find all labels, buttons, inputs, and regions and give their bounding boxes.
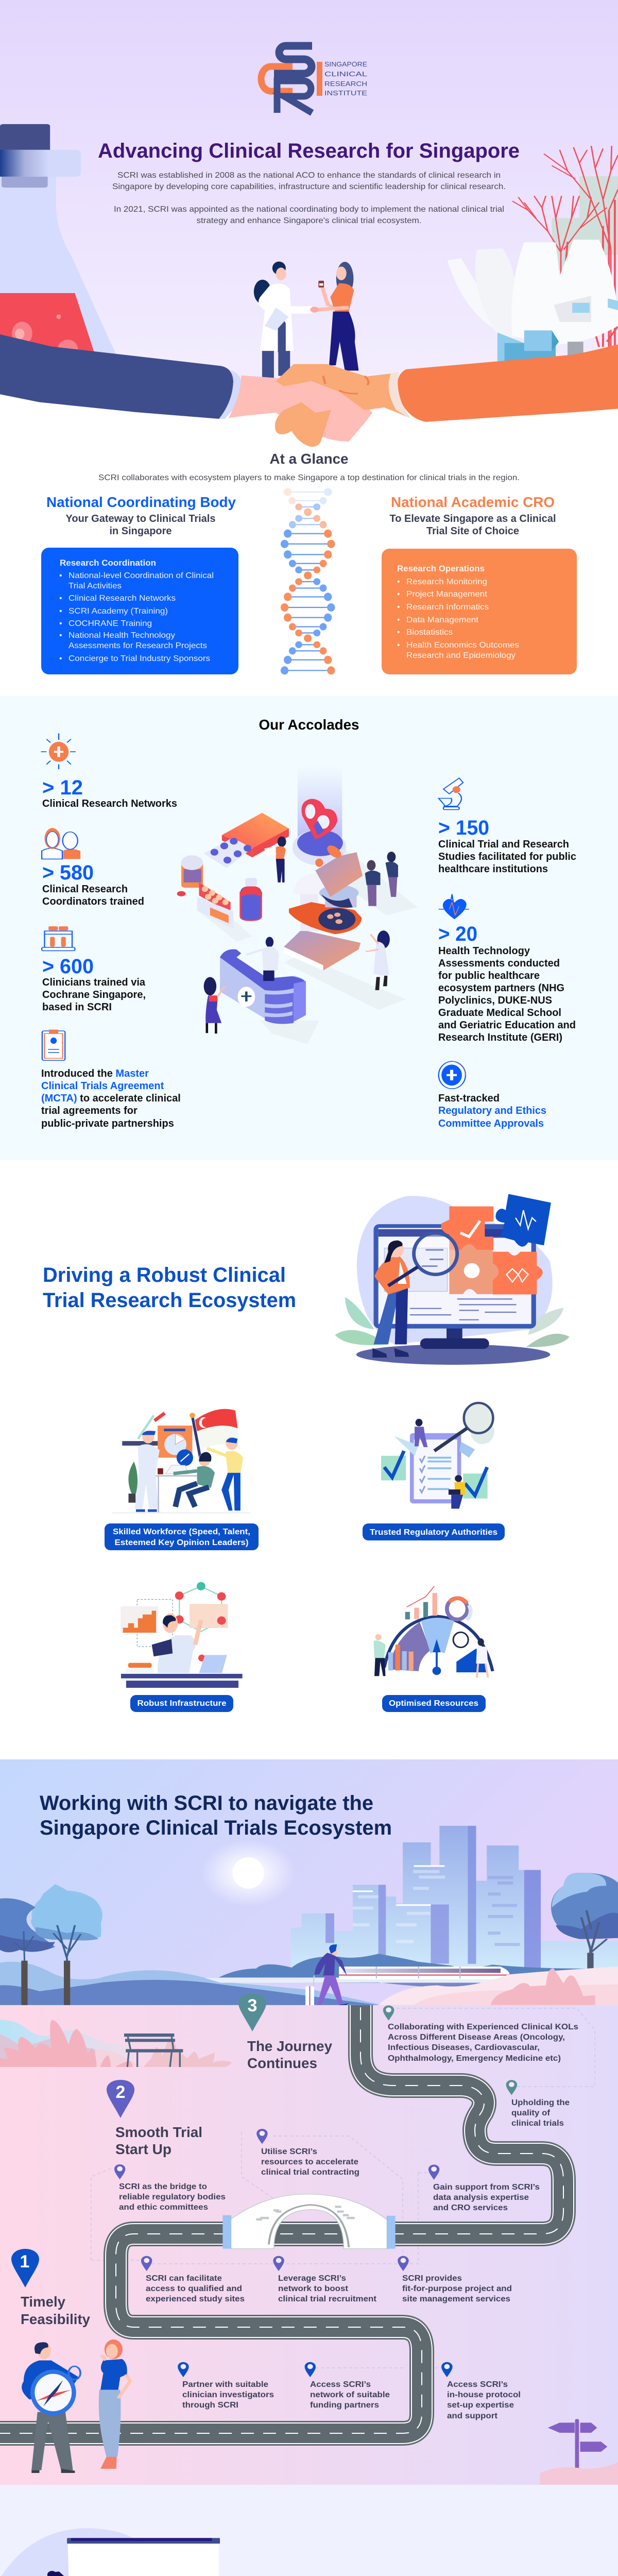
text blocks: journey steps: experienced study sites	[146, 2295, 245, 2303]
heading: national coordinating body: in Singapore	[109, 526, 172, 537]
heading: the journey continues: The Journey	[247, 2038, 332, 2054]
panel: research coordination: Concierge to Trial Industry Sponsors	[68, 654, 210, 663]
heading: national academic CRO: Trial Site of Choice	[426, 526, 519, 537]
stat: 20 health technology assessments: ecosystem partners (NHG	[438, 982, 564, 994]
stat: fast-tracked approvals	[438, 1061, 546, 1129]
panel: research coordination: Assessments for Research Projects	[68, 641, 207, 650]
stat: 12 networks	[41, 733, 177, 809]
heading: driving a robust ecosystem: Driving a Robust Clinical	[43, 1264, 286, 1286]
illustration: isometric clinic	[177, 766, 418, 1044]
text block: introduction	[112, 171, 506, 225]
icon: microscope	[439, 778, 463, 809]
panel: research coordination: •	[59, 571, 62, 580]
stat: 150 studies	[438, 778, 576, 875]
panel: working with SCRI	[0, 1759, 618, 2485]
panel: research coordination: •	[59, 594, 62, 603]
illustration: doctor and patient	[254, 262, 358, 379]
stat: 12 networks: Clinical Research Networks	[42, 798, 177, 809]
text blocks: journey steps: reliable regulatory bodies	[119, 2193, 226, 2201]
text block: introduction: SCRI was established in 2008 as the national ACO to enhance the standards of clinical research in	[117, 171, 501, 180]
label: trusted regulatory authorities	[363, 1523, 505, 1540]
illustration: optimised resources	[374, 1586, 493, 1677]
logo: SCRI	[261, 46, 367, 113]
stat: 20 health technology assessments: Polyclinics, DUKE-NUS	[438, 995, 552, 1006]
stat: 150 studies: Studies facilitated for public	[438, 851, 576, 862]
text block: subtitle: SCRI collaborates with ecosystem players to make Singapore a top destination for clinical trials in the region.	[98, 473, 520, 482]
stat: master clinical trials agreement: trial agreements for	[41, 1105, 138, 1116]
heading: national coordinating body: National Coordinating Body	[46, 494, 236, 510]
heading: national academic CRO: To Elevate Singapore as a Clinical	[389, 513, 556, 524]
illustration: bench and bushes	[0, 2020, 232, 2067]
panel: research operations: •	[397, 641, 400, 650]
panel: research coordination: National-level Coordination of Clinical	[68, 571, 214, 580]
heading: timely feasibility: Timely	[21, 2294, 65, 2310]
panel: research coordination: Trial Activities	[68, 582, 122, 590]
heading: our accolades: Our Accolades	[259, 717, 359, 733]
stat: 20 health technology assessments	[438, 894, 576, 1043]
text blocks: journey steps: and support	[447, 2412, 498, 2420]
stat: 20 health technology assessments: > 20	[438, 923, 477, 945]
stat: 580 coordinators: > 580	[42, 861, 94, 884]
icon: test tubes	[42, 926, 75, 951]
label: robust infrastructure	[130, 1695, 233, 1712]
stat: 20 health technology assessments: Assessments conducted	[438, 958, 560, 969]
heading: at a glance: At a Glance	[270, 451, 348, 467]
panel: research coordination: National Health Technology	[68, 631, 175, 640]
heading: the journey continues	[247, 2038, 332, 2071]
illustration: bridge	[222, 2194, 396, 2249]
panel: research coordination: COCHRANE Training	[68, 619, 152, 628]
marker: step 1	[11, 2249, 39, 2287]
stat: 150 studies: > 150	[438, 817, 489, 839]
heading: national coordinating body: Your Gateway to Clinical Trials	[66, 513, 215, 524]
stat: 20 health technology assessments: Graduate Medical School	[438, 1007, 561, 1019]
label: trusted regulatory authorities: Trusted Regulatory Authorities	[370, 1528, 497, 1537]
illustration: robust infrastructure	[121, 1582, 243, 1688]
label: skilled workforce	[105, 1523, 259, 1550]
stat: master clinical trials agreement: (MCTA)	[41, 1093, 77, 1104]
illustration: traveller	[305, 1944, 349, 2009]
heading: national academic CRO: National Academic CRO	[391, 494, 555, 510]
text blocks: journey steps: in-house protocol	[447, 2391, 521, 2399]
heading: national coordinating body	[46, 494, 236, 537]
icon: clipboard	[42, 1029, 65, 1060]
panel: research coordination: •	[59, 631, 62, 640]
title: Advancing Clinical Research for Singapore	[98, 140, 520, 162]
stat: master clinical trials agreement: Clinical Trials Agreement	[41, 1080, 164, 1092]
panel: research coordination: •	[59, 619, 62, 628]
stat: fast-tracked approvals: Fast-tracked	[438, 1093, 500, 1104]
panel: research operations: Research Informatics	[406, 603, 489, 612]
stat: master clinical trials agreement: to accelerate clinical	[77, 1093, 181, 1104]
text blocks: journey steps: clinical trial contracting	[261, 2168, 359, 2177]
text blocks: journey steps: Infectious Diseases, Cardiovascular,	[388, 2043, 540, 2052]
text blocks: journey steps: and ethic committees	[119, 2203, 208, 2212]
text block: introduction: Singapore by developing core capabilities, infrastructure and scientific leadership for clinical research.	[112, 182, 506, 191]
stat: 600 clinicians: > 600	[42, 955, 94, 978]
heading: smooth trial start up: Smooth Trial	[115, 2124, 202, 2140]
stat: 20 health technology assessments: Health Technology	[438, 945, 530, 957]
heading: smooth trial start up: Start Up	[115, 2141, 171, 2157]
text blocks: journey steps: clinical trials	[511, 2119, 564, 2128]
text blocks: journey steps: and CRO services	[433, 2204, 508, 2212]
text blocks: journey steps: access to qualified and	[146, 2284, 242, 2293]
stat: 150 studies: Clinical Trial and Research	[438, 839, 569, 850]
panel: research operations: •	[397, 603, 400, 612]
stat: 580 coordinators: Clinical Research	[42, 884, 128, 895]
panel: research operations: •	[397, 590, 400, 599]
text blocks: journey steps: clinician investigators	[182, 2391, 274, 2399]
heading: smooth trial start up	[115, 2124, 202, 2157]
panel: driving a robust ecosystem	[43, 1194, 570, 1712]
stat: 12 networks: > 12	[42, 776, 83, 799]
stat: 600 clinicians: Clinicians trained via	[42, 977, 146, 988]
panel: research coordination	[41, 548, 238, 674]
text blocks: journey steps: clinical trial recruitment	[278, 2295, 377, 2303]
text blocks: journey steps: through SCRI	[182, 2401, 238, 2410]
panel: research operations: Health Economics Outcomes	[406, 641, 519, 650]
illustration: trusted regulatory authorities	[381, 1403, 494, 1509]
heading: timely feasibility: Feasibility	[21, 2311, 90, 2327]
text blocks: journey steps: Leverage SCRI’s	[278, 2274, 346, 2283]
icon: coordinators	[42, 828, 80, 859]
stat: master clinical trials agreement: Introduced the	[41, 1068, 115, 1079]
stat: master clinical trials agreement: Master	[115, 1068, 149, 1079]
stat: 20 health technology assessments: Research Institute (GERI)	[438, 1032, 562, 1043]
stat: 150 studies: healthcare institutions	[438, 863, 548, 875]
panel: research operations: Data Management	[406, 616, 479, 624]
text blocks: journey steps: Upholding the	[511, 2098, 570, 2107]
text blocks: journey steps: Collaborating with Experienced Clinical KOLs	[388, 2023, 578, 2031]
panel: research operations: Biostatistics	[406, 628, 453, 637]
logo: SCRI: INSTITUTE	[324, 89, 367, 97]
stat: fast-tracked approvals: Regulatory and Ethics	[438, 1105, 546, 1116]
icon: heart	[439, 894, 469, 919]
panel: our accolades	[0, 696, 618, 1160]
icon: networks	[41, 733, 76, 769]
illustration: supertrees and ArtScience Museum	[448, 146, 618, 363]
panel: research operations: •	[397, 578, 400, 586]
text blocks: journey steps: SCRI provides	[402, 2274, 462, 2283]
marker: step 3: 3	[248, 1996, 257, 2015]
text blocks: journey steps: funding partners	[310, 2401, 379, 2410]
heading: working with SCRI	[40, 1792, 392, 1839]
panel: research coordination: Clinical Research Networks	[68, 594, 176, 603]
panel: research operations: Research and Epidemiology	[406, 651, 516, 660]
text blocks: journey steps: network of suitable	[310, 2391, 390, 2399]
heading: driving a robust ecosystem: Trial Research Ecosystem	[43, 1289, 296, 1312]
heading: national academic CRO	[389, 494, 556, 537]
illustration: compass couple	[22, 2340, 130, 2473]
label: skilled workforce: Esteemed Key Opinion Leaders)	[114, 1538, 248, 1547]
stat: 600 clinicians: based in SCRI	[42, 1002, 112, 1013]
text blocks: journey steps: SCRI as the bridge to	[119, 2182, 207, 2191]
illustration: handshake	[0, 334, 618, 452]
panel: research operations: Project Management	[406, 590, 488, 599]
illustration: DNA helix	[281, 488, 335, 674]
text blocks: journey steps: resources to accelerate	[261, 2158, 358, 2166]
label: robust infrastructure: Robust Infrastructure	[137, 1699, 227, 1708]
stat: master clinical trials agreement	[41, 1029, 183, 1129]
panel: research operations: Research Monitoring	[406, 578, 487, 586]
text blocks: journey steps: set-up expertise	[447, 2401, 514, 2410]
marker: step 2: 2	[116, 2082, 125, 2102]
marker: step 3	[238, 1993, 266, 2031]
panel: at a glance	[41, 451, 577, 674]
text blocks: journey steps: SCRI can facilitate	[146, 2274, 222, 2283]
text blocks: journey steps: Access SCRI’s	[310, 2380, 371, 2389]
sub-elements: people	[204, 836, 398, 1033]
illustration: winding road	[0, 2005, 563, 2433]
text blocks: journey steps: network to boost	[278, 2284, 349, 2293]
panel: journey road map	[0, 1993, 618, 2485]
illustration: skilled workforce	[112, 1409, 250, 1513]
text blocks: journey steps: site management services	[402, 2295, 510, 2303]
stat: 600 clinicians	[42, 926, 146, 1013]
label: optimised resources	[382, 1695, 486, 1712]
panel: research operations	[382, 549, 577, 674]
text blocks: journey steps: Ophthalmology, Emergency Medicine etc)	[388, 2054, 561, 2063]
illustration: monitor with puzzle pieces	[335, 1194, 570, 1365]
illustration: classroom	[0, 2528, 287, 2576]
stat: 580 coordinators	[42, 828, 144, 907]
illustration: signpost	[540, 2419, 618, 2485]
text blocks: journey steps	[119, 2023, 578, 2420]
text blocks: journey steps: data analysis expertise	[433, 2193, 529, 2202]
marker: step 1: 1	[20, 2252, 29, 2272]
heading: timely feasibility	[21, 2294, 90, 2327]
illustration: city skyline	[0, 1759, 618, 2009]
heading: working with SCRI: Working with SCRI to navigate the	[40, 1792, 373, 1815]
icon: location pins	[114, 2006, 517, 2377]
label: skilled workforce: Skilled Workforce (Speed, Talent,	[113, 1528, 250, 1536]
text block: introduction: In 2021, SCRI was appointed as the national coordinating body to implement the national clinical trial	[114, 205, 504, 214]
heading: working with SCRI: Singapore Clinical Trials Ecosystem	[40, 1817, 392, 1839]
text blocks: journey steps: Partner with suitable	[182, 2380, 268, 2389]
panel: research operations: •	[397, 628, 400, 637]
text blocks: journey steps: quality of	[511, 2109, 551, 2117]
panel: research coordination: Research Coordination	[60, 558, 156, 568]
panel: hero header	[0, 0, 618, 452]
logo: SCRI: SINGAPORE	[324, 60, 367, 68]
text blocks: journey steps: Utilise SCRI’s	[261, 2147, 317, 2156]
stat: 20 health technology assessments: and Geriatric Education and	[438, 1020, 576, 1031]
stat: 20 health technology assessments: for public healthcare	[438, 970, 540, 981]
stat: 600 clinicians: Cochrane Singapore,	[42, 989, 146, 1001]
stat: fast-tracked approvals: Committee Approvals	[438, 1118, 544, 1129]
marker: step 2	[107, 2080, 134, 2118]
stat: 580 coordinators: Coordinators trained	[42, 896, 144, 907]
illustration: dashed connectors	[91, 2008, 595, 2368]
icon: medical cross bubble	[439, 1061, 466, 1089]
logo: SCRI: CLINICAL	[324, 70, 367, 78]
heading: the journey continues: Continues	[247, 2055, 317, 2071]
text block: introduction: strategy and enhance Singapore's clinical trial ecosystem.	[197, 216, 421, 225]
panel: research coordination: SCRI Academy (Training)	[68, 607, 168, 616]
panel: research coordination: •	[59, 607, 62, 616]
label: optimised resources: Optimised Resources	[389, 1699, 478, 1708]
stat: master clinical trials agreement: public-private partnerships	[41, 1118, 174, 1129]
heading: driving a robust ecosystem	[43, 1264, 296, 1312]
text blocks: journey steps: Access SCRI’s	[447, 2380, 508, 2389]
panel: research operations: •	[397, 616, 400, 624]
text blocks: journey steps: Gain support from SCRI’s	[433, 2183, 540, 2192]
panel: research operations: Research Operations	[397, 564, 485, 573]
panel: nurturing talent	[0, 2485, 618, 2576]
logo: SCRI: RESEARCH	[324, 80, 367, 88]
text blocks: journey steps: Across Different Disease Areas (Oncology,	[388, 2033, 565, 2042]
illustration: flask	[0, 124, 116, 360]
text blocks: journey steps: fit-for-purpose project and	[402, 2284, 512, 2293]
panel: research coordination: •	[59, 654, 62, 663]
